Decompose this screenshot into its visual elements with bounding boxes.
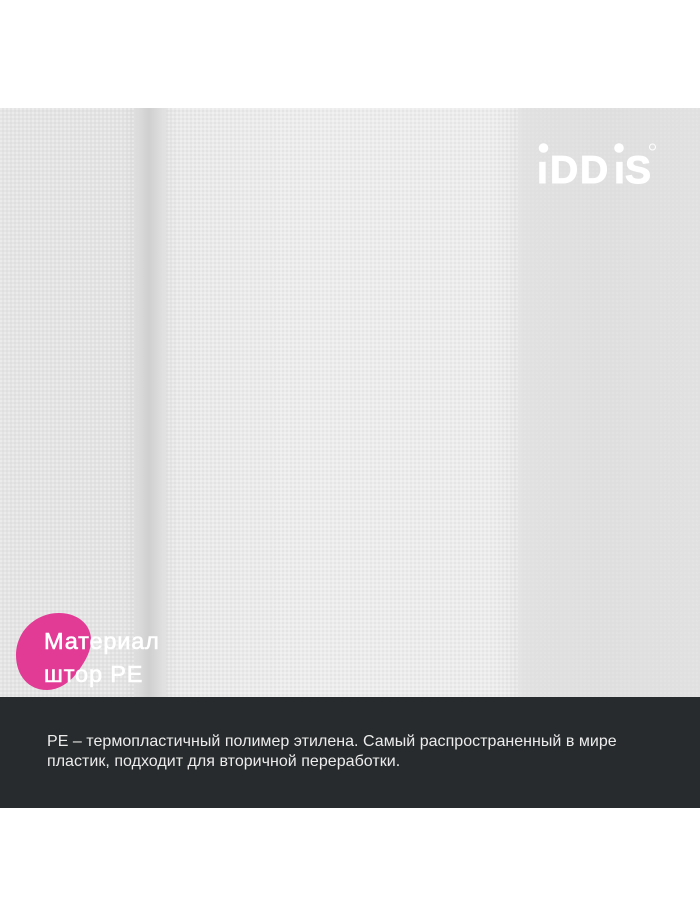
title (44, 628, 160, 688)
logo: IDDIS: ı (537, 149, 548, 192)
logo: IDDIS: S (625, 149, 651, 192)
title: штор PE (44, 661, 143, 687)
text block: description: пластик, подходит для вторичной переработки. (47, 753, 400, 770)
panel: fabric photo (0, 108, 700, 697)
logo: IDDIS: D (580, 149, 608, 192)
logo: IDDIS: ı (614, 149, 625, 192)
logo: IDDIS (537, 143, 656, 192)
icon: pink blob (16, 613, 91, 690)
panel: description band (0, 697, 700, 808)
logo: IDDIS: D (550, 149, 578, 192)
text block: description: PE – термопластичный полимер этилена. Самый распространенный в мире (47, 733, 617, 750)
text block: description (47, 733, 617, 770)
title: Материал (44, 628, 160, 654)
